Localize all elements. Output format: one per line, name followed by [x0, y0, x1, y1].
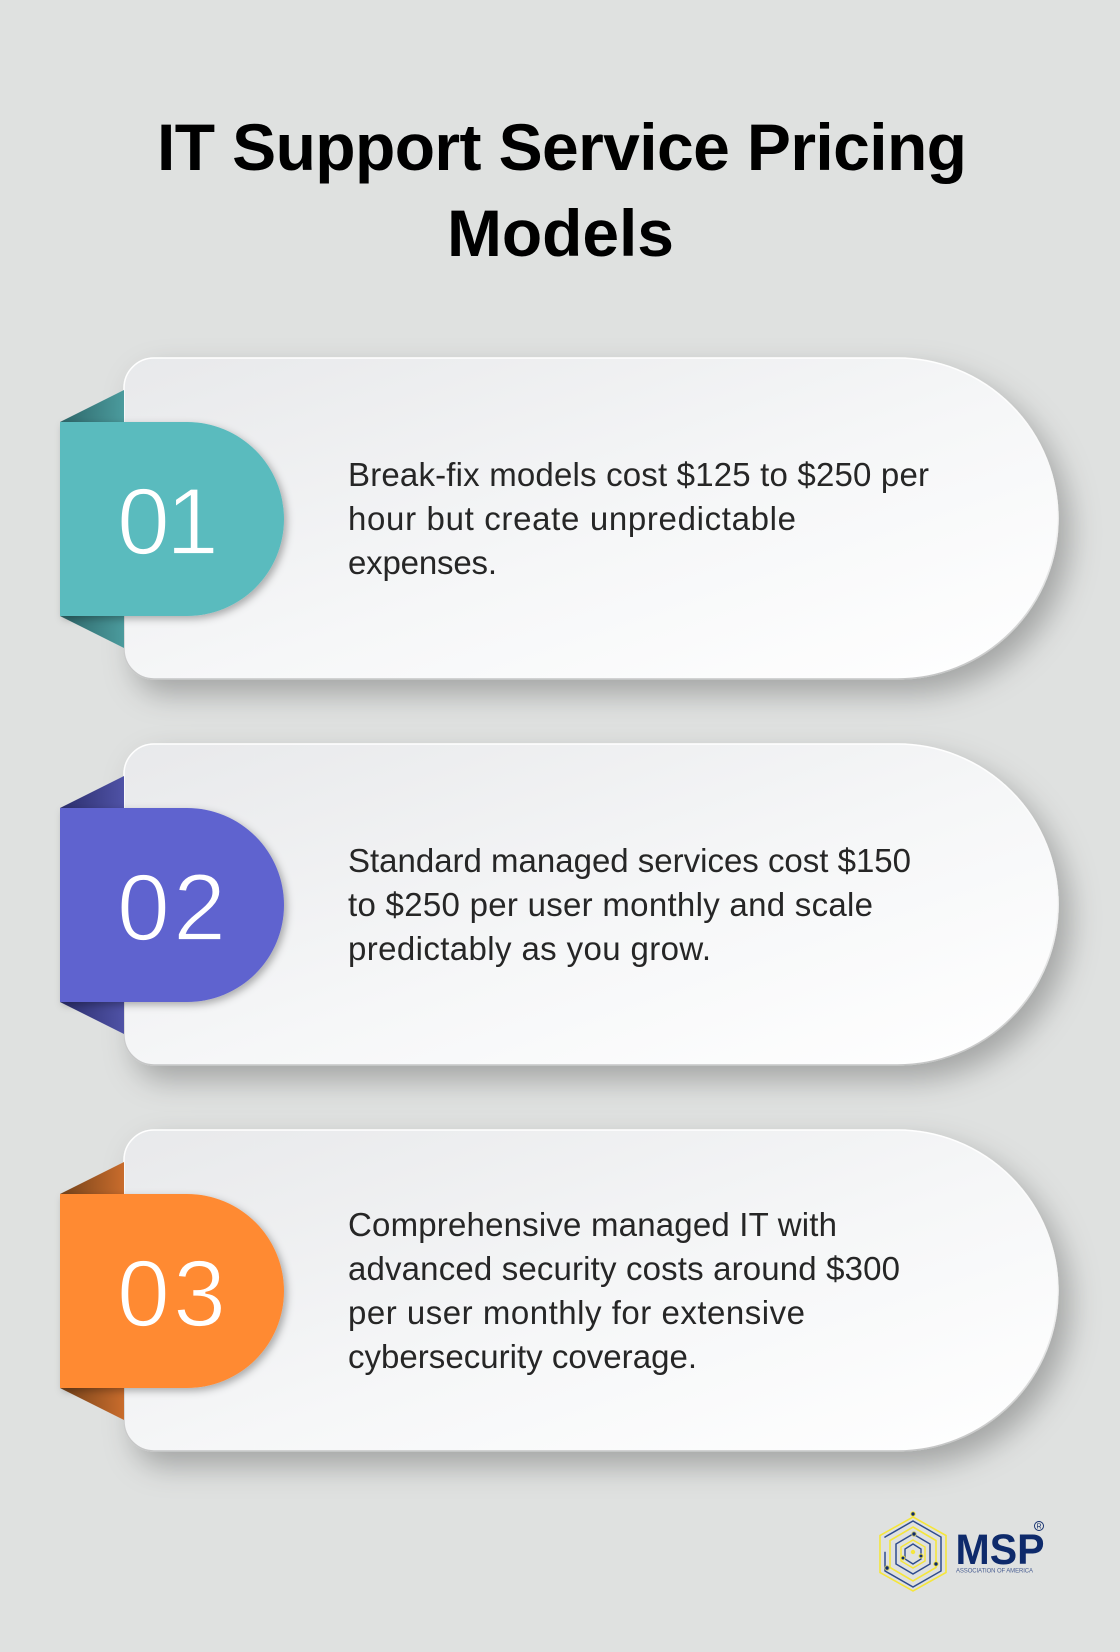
title: IT Support Service Pricing: [157, 110, 967, 184]
panel: step 3 comprehensive managed IT: [60, 1130, 1058, 1451]
icon: concentric hexagons: [880, 1512, 946, 1591]
card 3 text: Comprehensive managed IT with: [348, 1206, 837, 1243]
card 3 text: per user monthly for extensive: [348, 1294, 805, 1331]
number badge 2: [60, 808, 284, 1002]
card 2 text: Standard managed services cost $150: [348, 842, 911, 879]
logo wordmark: MSP: [956, 1526, 1044, 1574]
card 1 text: hour but create unpredictable: [348, 500, 796, 537]
card 1 text: Break-fix models cost $125 to $250 per: [348, 456, 929, 493]
card 2 text: predictably as you grow.: [348, 930, 711, 967]
registered mark: [1034, 1522, 1044, 1530]
card 3 text: cybersecurity coverage.: [348, 1338, 697, 1375]
ribbon folds 1: [60, 390, 124, 648]
number badge 1: [60, 422, 284, 616]
card 3 text: advanced security costs around $300: [348, 1250, 900, 1287]
registered mark: R: [1036, 1524, 1042, 1530]
logo tagline: ASSOCIATION OF AMERICA: [956, 1568, 1033, 1574]
card 3 text: [348, 1206, 900, 1375]
ribbon folds 3: [60, 1162, 124, 1420]
title: [157, 110, 967, 270]
panel: step 1 break-fix: [60, 358, 1058, 679]
card 2 body: [124, 744, 1058, 1065]
number 03: 03: [117, 1241, 226, 1347]
card 1 text: [348, 456, 929, 581]
number badge 3: [60, 1194, 284, 1388]
number 01: 01: [117, 469, 219, 575]
card 2 text: to $250 per user monthly and scale: [348, 886, 873, 923]
card 3 body: [124, 1130, 1058, 1451]
card 2 text: [348, 842, 911, 967]
card 1 body: [124, 358, 1058, 679]
number 02: 02: [117, 855, 226, 961]
card 1 text: expenses.: [348, 544, 497, 581]
panel: step 2 standard managed services: [60, 744, 1058, 1065]
ribbon folds 2: [60, 776, 124, 1034]
logo: MSP Association of America: [880, 1512, 1044, 1591]
title: Models: [447, 196, 674, 270]
